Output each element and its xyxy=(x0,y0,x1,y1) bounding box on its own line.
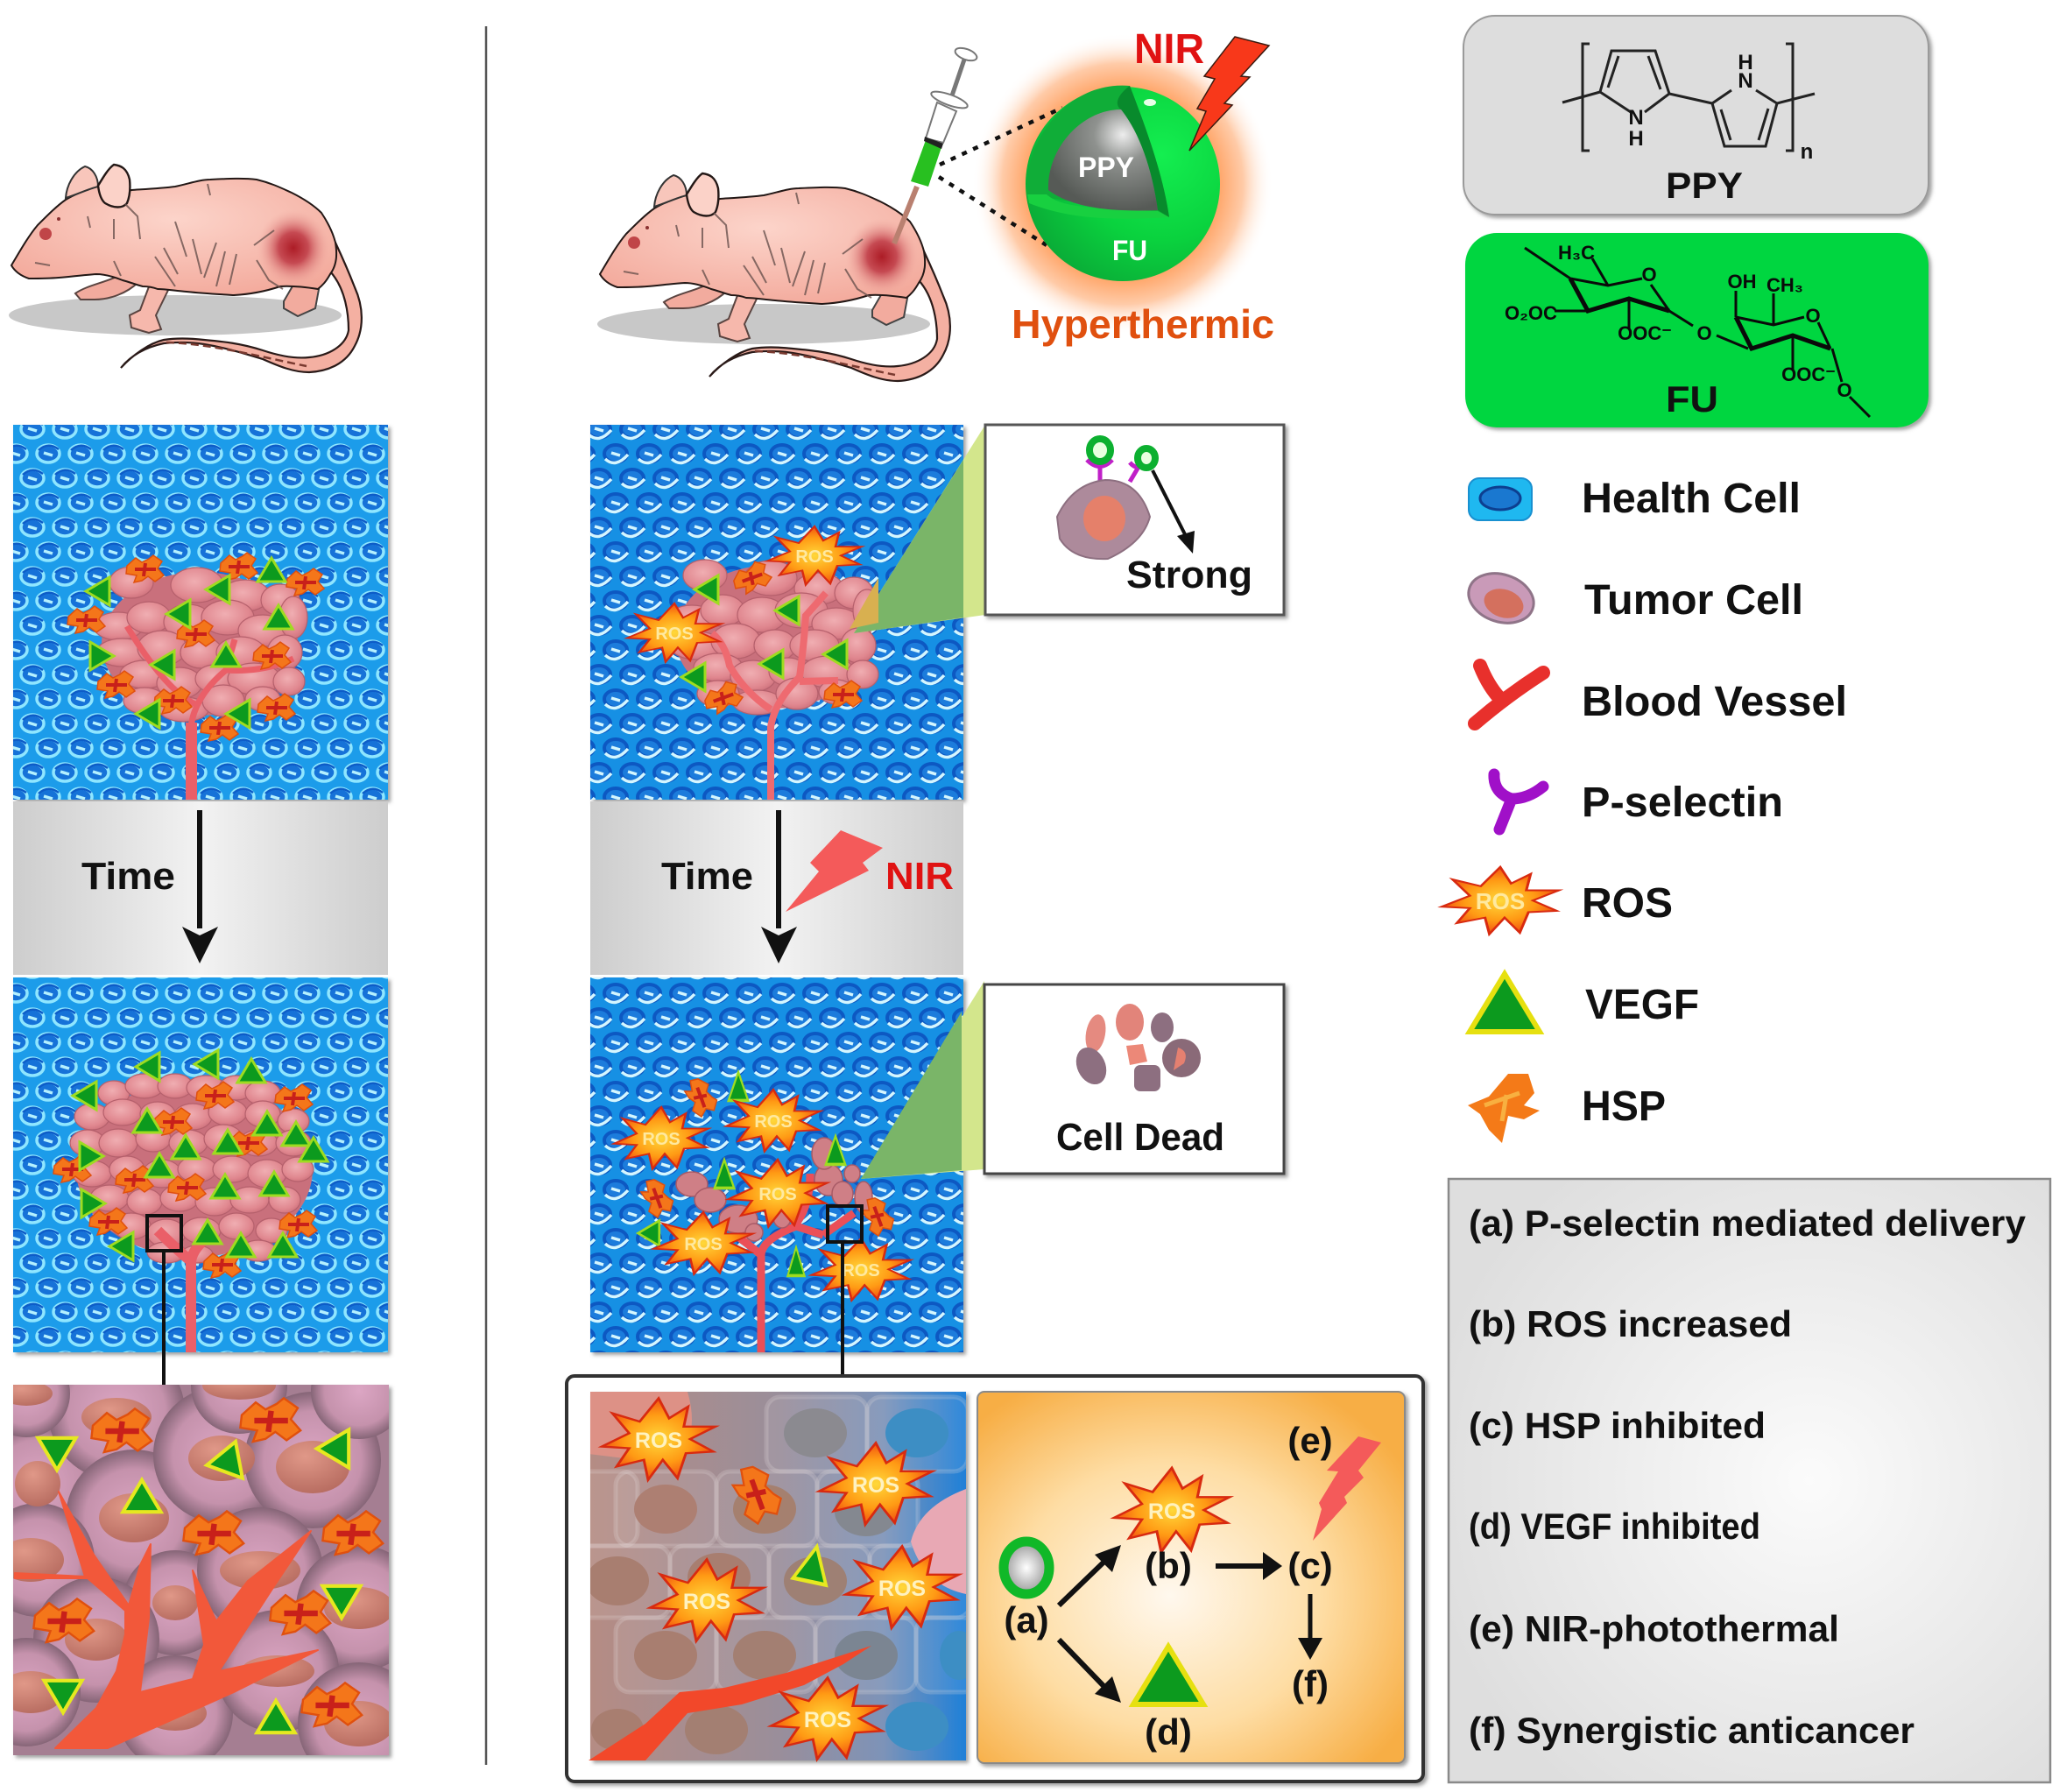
panel: treated tumor with ROS xyxy=(590,425,963,800)
nanoparticle: PPY core with FU shell xyxy=(1026,86,1220,281)
text: b: (b) ROS increased xyxy=(1469,1303,1792,1344)
text: d: (d) VEGF inhibited xyxy=(1469,1506,1760,1547)
panel: destroyed tumor xyxy=(590,977,963,1352)
label: Time: Time xyxy=(81,855,175,898)
markers: HSP and VEGF xyxy=(681,558,862,716)
legend item: VEGF: VEGF xyxy=(1585,982,1699,1028)
band: time passage xyxy=(13,801,388,975)
ROS burst xyxy=(726,1090,821,1152)
label: FU: FU xyxy=(1112,235,1147,266)
ROS burst xyxy=(767,526,862,585)
HSP and VEGF markers xyxy=(53,1050,328,1278)
card: PPY structure xyxy=(1463,16,1929,215)
column divider xyxy=(485,26,487,1765)
arrow: a to b xyxy=(1059,1545,1121,1605)
text: c: (c) HSP inhibited xyxy=(1469,1405,1766,1446)
icon: lightning bolt xyxy=(1189,37,1269,151)
label: e: (e) xyxy=(1287,1420,1333,1461)
ROS burst: ROS xyxy=(758,1185,797,1204)
card: FU structure xyxy=(1465,233,1929,427)
hyperthermic glow xyxy=(972,33,1273,335)
right column xyxy=(1442,16,2050,1782)
chemical structure: fucoidan: OOC⁻ xyxy=(1618,322,1672,344)
chemical structure: polypyrrole: n xyxy=(1801,140,1813,164)
icon: NIR bolt xyxy=(1313,1436,1381,1541)
panel: magnified cells under treatment xyxy=(561,1392,978,1760)
chemical structure: fucoidan: O xyxy=(1696,322,1712,344)
text: e: (e) NIR-photothermal xyxy=(1469,1608,1839,1649)
legend item: Tumor Cell xyxy=(1463,566,1803,631)
icon: cell fragments xyxy=(1070,1004,1201,1091)
HSP and VEGF markers xyxy=(67,553,324,741)
zoom connector xyxy=(841,1242,844,1376)
markers: HSP and VEGF xyxy=(729,1460,833,1585)
chemical structure: polypyrrole: H xyxy=(1738,51,1753,74)
ROS burst xyxy=(771,1678,885,1760)
zoom marker square xyxy=(147,1216,181,1251)
chemical structure: fucoidan xyxy=(1505,242,1870,417)
ROS burst xyxy=(653,1212,753,1274)
zoom funnel: tumor to Cell Dead callout xyxy=(861,981,984,1179)
label: PPY: PPY xyxy=(1078,152,1134,183)
zoom funnel: tumor to Strong callout xyxy=(850,425,985,633)
illustration: nude mouse with ground shadow xyxy=(9,165,362,372)
ROS burst xyxy=(614,1107,709,1169)
treatment column xyxy=(561,26,1423,1781)
legend item: Health Cell xyxy=(1469,476,1801,522)
label: b: (b) xyxy=(1145,1545,1192,1586)
label: Time: Time xyxy=(661,855,753,898)
blood vessel xyxy=(589,1646,871,1760)
ROS burst: ROS xyxy=(683,1590,730,1614)
label: d: (d) xyxy=(1145,1711,1192,1753)
legend item: VEGF xyxy=(1470,974,1699,1032)
zoom connector xyxy=(162,1251,166,1385)
ROS burst: ROS xyxy=(878,1577,926,1601)
chemical structure: fucoidan: H₃C xyxy=(1558,242,1595,264)
label: Hyperthermic: Hyperthermic xyxy=(1012,301,1274,347)
blood vessel xyxy=(15,1492,318,1748)
panel: mechanism flow diagram xyxy=(977,1392,1405,1763)
label: Cell Dead: Cell Dead xyxy=(1056,1116,1224,1159)
label: f: (f) xyxy=(1292,1663,1329,1704)
callout: strong binding xyxy=(985,425,1284,615)
icon: tumor cell with P-selectin and nanoparticles xyxy=(1057,439,1155,559)
legend item: Blood Vessel xyxy=(1475,666,1847,725)
legend item: Blood Vessel: Blood Vessel xyxy=(1582,679,1847,725)
text: a: (a) P-selectin mediated delivery xyxy=(1469,1203,2027,1244)
chemical structure: polypyrrole: N xyxy=(1628,106,1644,130)
callout: cell death xyxy=(984,984,1284,1174)
arrow: b to c xyxy=(1216,1552,1282,1580)
legend item: HSP: HSP xyxy=(1582,1083,1666,1130)
chemical structure: fucoidan: O xyxy=(1641,264,1657,286)
chemical structure: polypyrrole: H xyxy=(1628,127,1644,151)
label: NIR: NIR xyxy=(885,855,954,898)
label: a: (a) xyxy=(1004,1599,1049,1640)
ROS burst: ROS xyxy=(804,1708,851,1732)
ROS burst: ROS xyxy=(852,1473,899,1498)
ROS burst: ROS xyxy=(795,547,834,567)
ROS burst xyxy=(1114,1468,1230,1552)
ROS burst: ROS xyxy=(642,1130,680,1149)
legend item: Health Cell: Health Cell xyxy=(1582,476,1801,522)
ROS burst xyxy=(627,603,722,662)
arrow: to Strong xyxy=(1153,470,1195,554)
legend xyxy=(1442,476,1847,1143)
legend item: ROS xyxy=(1442,867,1673,934)
legend item: ROS: ROS xyxy=(1476,888,1525,914)
label: Strong: Strong xyxy=(1126,554,1252,596)
ROS burst: ROS xyxy=(655,624,694,644)
icon: VEGF triangle xyxy=(1133,1647,1203,1704)
panel: magnified tumor cells with vessels xyxy=(13,1385,394,1760)
panel: enlarged tumor xyxy=(13,977,388,1352)
zoom marker square xyxy=(828,1206,862,1242)
ROS burst: ROS xyxy=(684,1235,723,1254)
legend item: P-selectin xyxy=(1494,774,1783,829)
ROS burst xyxy=(845,1547,959,1628)
control column xyxy=(9,163,394,1760)
label: PPY: PPY xyxy=(1666,165,1743,206)
chemical structure: polypyrrole: N xyxy=(1738,69,1753,93)
label: c: (c) xyxy=(1287,1545,1333,1586)
chemical structure: fucoidan: OH xyxy=(1727,271,1757,293)
label: NIR: NIR xyxy=(1134,26,1204,73)
ROS burst: ROS xyxy=(754,1112,793,1132)
ROS burst: ROS xyxy=(842,1261,880,1281)
ROS burst xyxy=(602,1398,716,1480)
icon: nanoparticle xyxy=(1004,1542,1049,1594)
ROS burst xyxy=(728,1160,828,1226)
text: f: (f) Synergistic anticancer xyxy=(1469,1710,1914,1751)
icon: NIR bolt xyxy=(786,830,883,912)
ROS burst xyxy=(811,1238,911,1301)
icon: syringe xyxy=(894,46,978,243)
panel: small tumor on healthy tissue xyxy=(13,425,388,800)
illustration: treated mouse with ground shadow xyxy=(597,173,950,381)
frame: mechanism box xyxy=(561,1376,1423,1781)
chemical structure: fucoidan: O xyxy=(1805,305,1821,327)
arrow: time xyxy=(182,810,218,963)
chemical structure: fucoidan: CH₃ xyxy=(1766,274,1803,296)
HSP and VEGF markers xyxy=(33,1398,383,1732)
markers: HSP and VEGF xyxy=(638,1072,898,1275)
ROS burst: ROS xyxy=(1148,1499,1195,1524)
ROS burst xyxy=(650,1559,764,1641)
legend item: ROS: ROS xyxy=(1582,880,1673,927)
panel: key to mechanism letters xyxy=(1449,1179,2050,1782)
chemical structure: fucoidan: O xyxy=(1837,379,1852,401)
chemical structure: polypyrrole xyxy=(1562,44,1815,164)
label: FU: FU xyxy=(1666,378,1718,420)
legend item: HSP xyxy=(1468,1074,1666,1143)
arrow: c to f xyxy=(1298,1594,1322,1660)
ROS burst xyxy=(819,1443,933,1525)
chemical structure: fucoidan: OOC⁻ xyxy=(1781,363,1836,385)
arrow: time xyxy=(761,810,797,963)
legend item: P-selectin: P-selectin xyxy=(1582,780,1783,826)
legend item: Tumor Cell: Tumor Cell xyxy=(1584,577,1803,624)
arrow: a to d xyxy=(1059,1640,1121,1703)
dotted zoom lines xyxy=(939,108,1062,245)
chemical structure: fucoidan: O₂OC xyxy=(1505,302,1557,324)
band: time passage with NIR xyxy=(590,801,963,975)
ROS burst: ROS xyxy=(635,1429,682,1453)
